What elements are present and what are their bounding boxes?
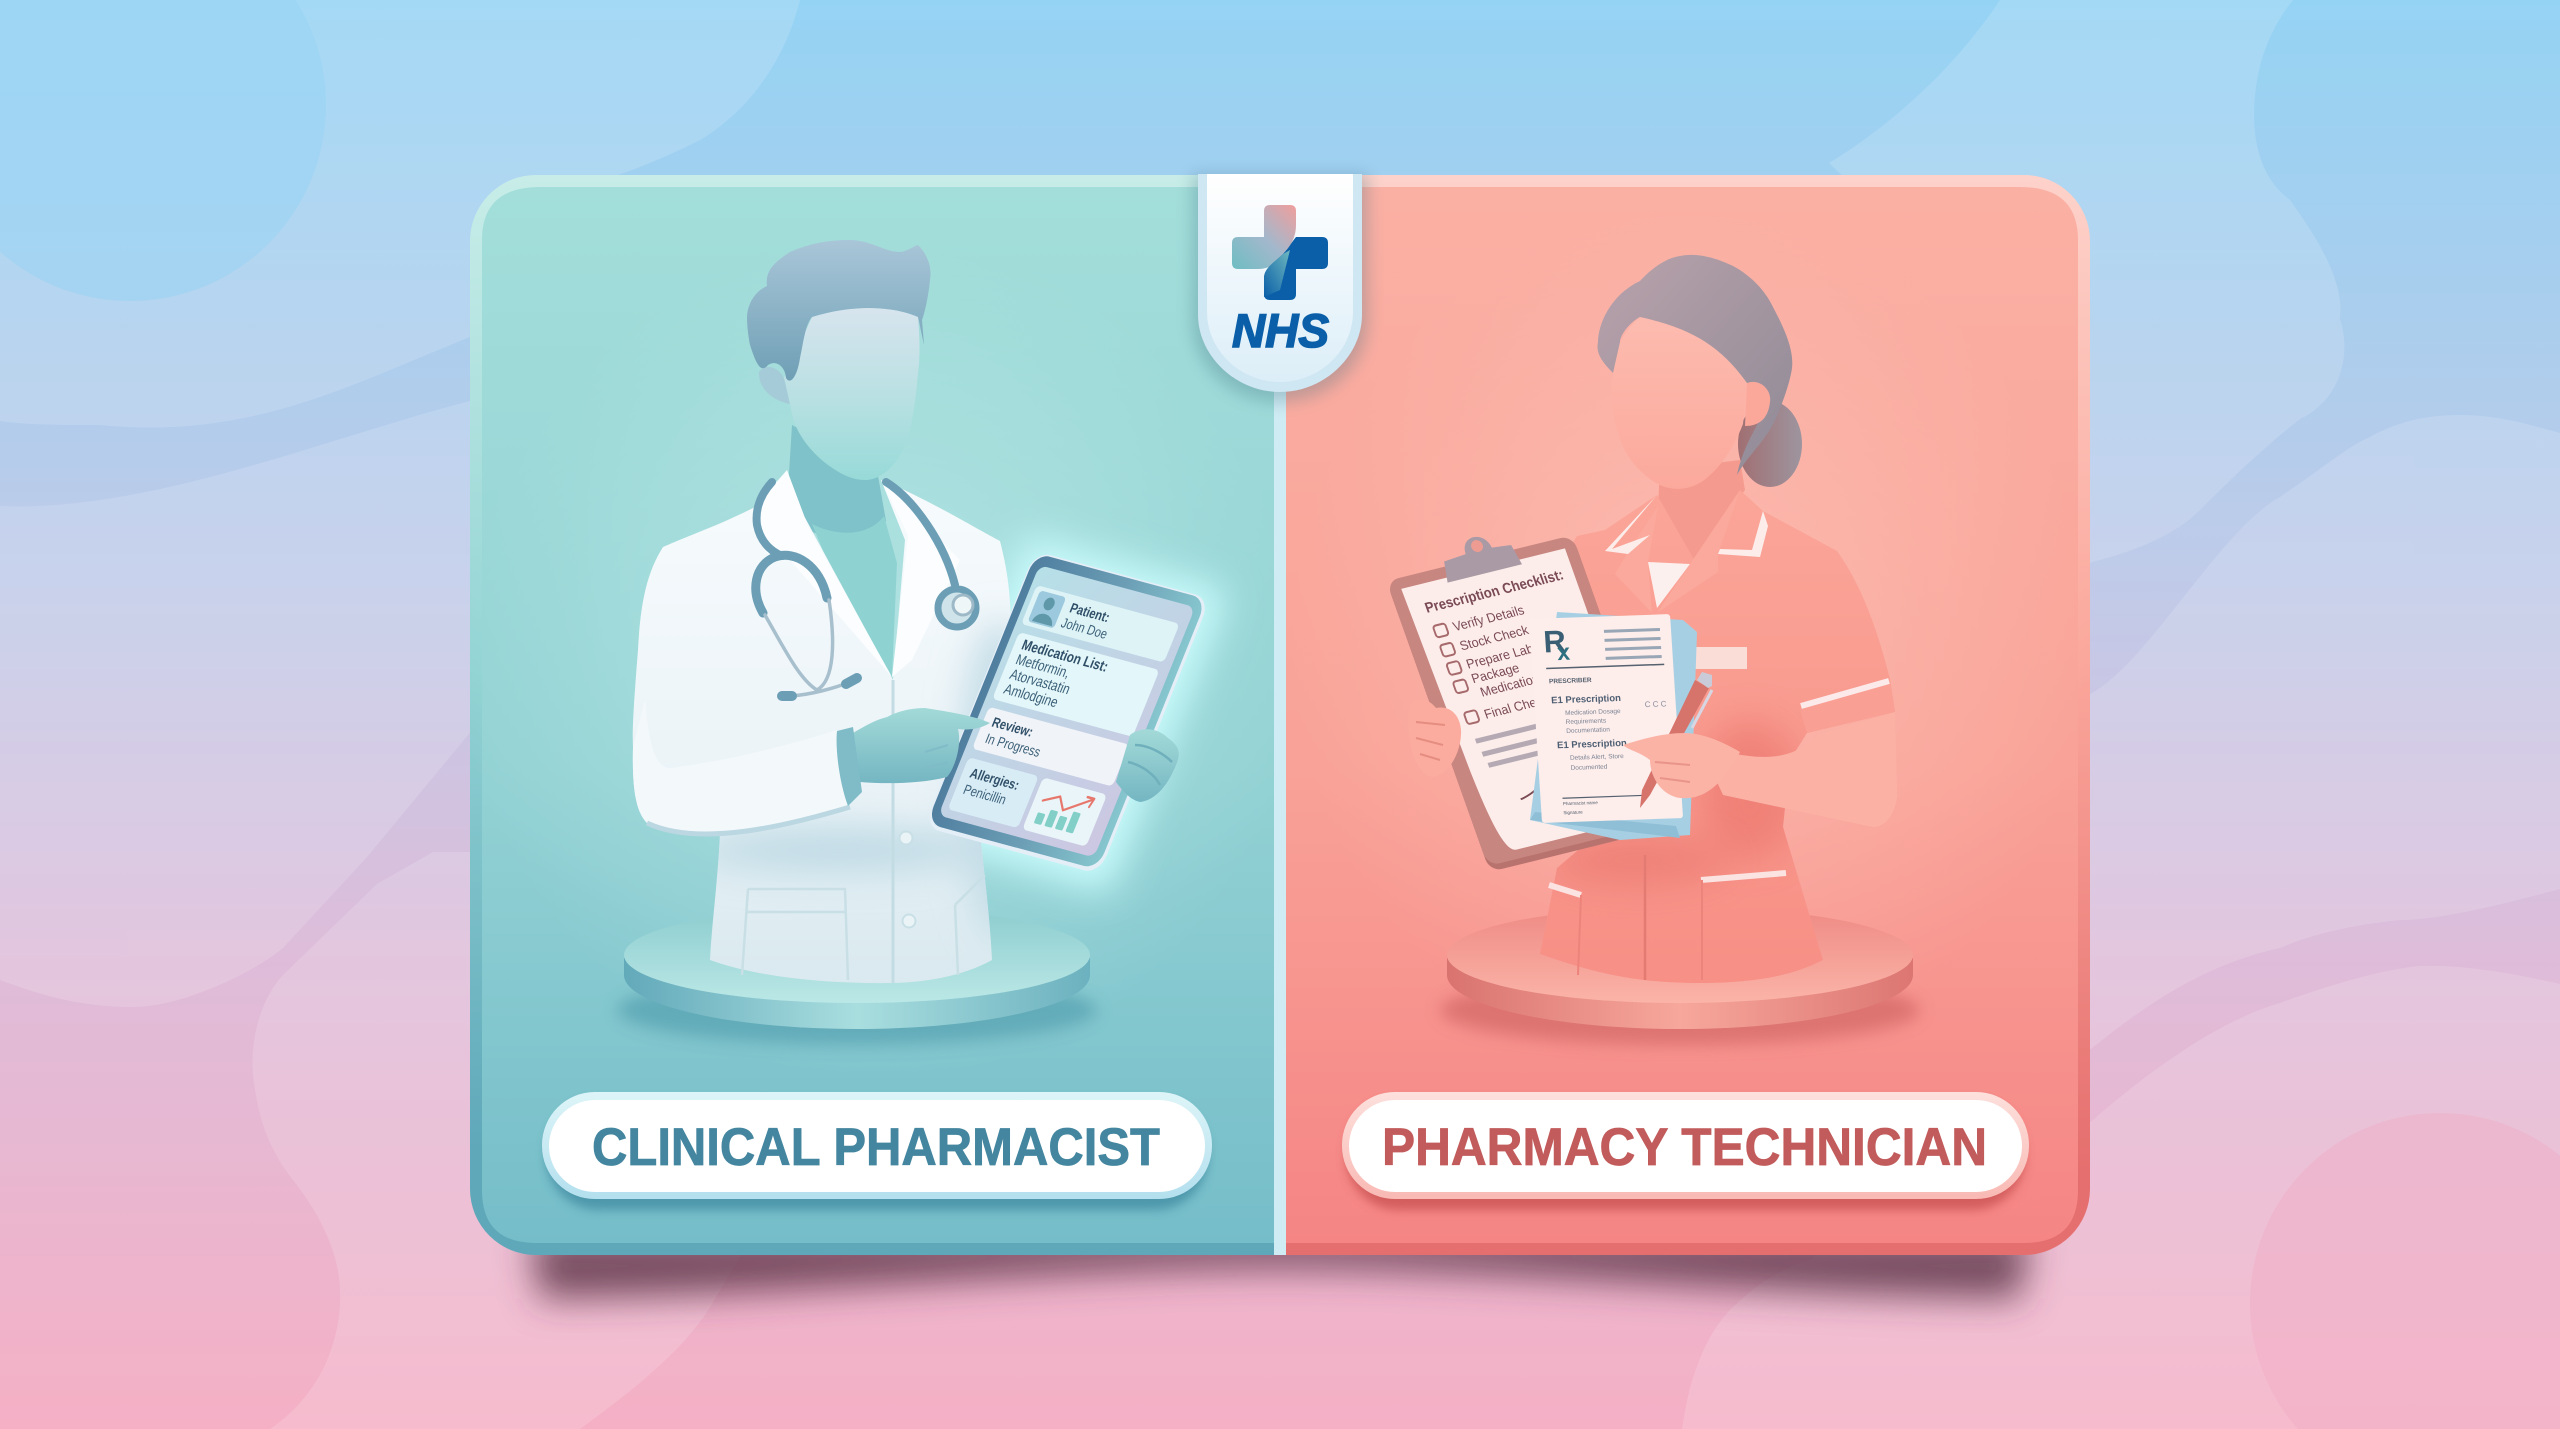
- prescription sheet: Signature: [1563, 810, 1583, 815]
- tablet card: patient: [1021, 585, 1180, 663]
- icon: NHS cross: [1232, 205, 1328, 300]
- NHS wordmark: NHS: [1232, 304, 1329, 357]
- clipboard: [1379, 515, 1676, 872]
- panel: pharmacy technician figure: [1379, 255, 1920, 1045]
- tablet card: patient: John Doe: [1059, 615, 1110, 642]
- platform: [1440, 907, 1920, 1045]
- pen: [1640, 672, 1712, 808]
- checklist text: Stock Check: [1457, 622, 1531, 653]
- head: [747, 240, 930, 480]
- prescription sheet: E1 Prescription: [1557, 738, 1627, 751]
- label: clinical pharmacist: CLINICAL PHARMACIST: [592, 1118, 1160, 1177]
- tablet: [924, 551, 1211, 874]
- tablet card: review: In Progress: [983, 731, 1043, 760]
- head: [1598, 255, 1792, 489]
- checklist text: Package: [1469, 660, 1521, 686]
- panel: clinical pharmacist background: [460, 175, 1300, 1255]
- tablet card: medication list: Amlodgine: [1002, 681, 1061, 711]
- tablet card: medication list: Atorvastatin: [1007, 666, 1073, 697]
- tablet card: medication list: Medication List:: [1019, 636, 1111, 675]
- prescription sheet: Pharmacist name: [1563, 800, 1598, 806]
- holding hand right: [1623, 733, 1740, 798]
- tablet card: review: Review:: [990, 715, 1035, 740]
- prescription sheet: Documentation: [1566, 726, 1611, 735]
- lab coat: [632, 470, 1010, 984]
- tablet card: allergies: Allergies:: [968, 766, 1022, 793]
- prescription sheet: C C C: [1644, 699, 1667, 709]
- checklist text: Medication: [1478, 671, 1542, 700]
- Rx symbol: x: [1556, 639, 1571, 665]
- prescription sheet: Documented: [1570, 764, 1608, 772]
- stethoscope: [756, 482, 976, 696]
- tablet card: medication list: Metformin,: [1013, 651, 1073, 681]
- holding hand left: [1408, 699, 1461, 777]
- clipboard clip: [1435, 528, 1522, 583]
- bun: [1738, 401, 1802, 487]
- checklist text: [1423, 567, 1620, 767]
- prescription sheet: E1 Prescription: [1551, 693, 1621, 706]
- prescription sheet: [1529, 614, 1683, 823]
- uniform: [1540, 490, 1896, 983]
- tablet card: allergies: Penicillin: [961, 782, 1009, 808]
- checklist text: Final Check: [1482, 691, 1551, 722]
- prescription sheet: PRESCRIBER: [1549, 677, 1592, 685]
- tablet card: medication list: [992, 632, 1160, 737]
- panel: clinical pharmacist figure: [617, 240, 1211, 1045]
- panel: pharmacy technician background: [1280, 175, 2090, 1255]
- label: pharmacy technician: [1342, 1092, 2029, 1210]
- NHS badge: [1192, 174, 1368, 402]
- tablet card: review: [972, 707, 1129, 787]
- Rx symbol: R: [1542, 624, 1567, 660]
- scrub top: [812, 516, 897, 677]
- label: clinical pharmacist: [542, 1092, 1212, 1210]
- pointing hand: [837, 708, 990, 806]
- neck: [788, 425, 886, 539]
- checklist text: Verify Details: [1451, 602, 1526, 634]
- tablet card: chart: [1022, 777, 1107, 847]
- tablet card: allergies: [948, 757, 1039, 828]
- panel: comparison card: [460, 175, 2090, 1255]
- glow behind tablet: [926, 553, 1210, 877]
- tablet card: patient: Patient:: [1067, 600, 1112, 625]
- platform: [617, 907, 1097, 1045]
- prescription sheet: Requirements: [1565, 718, 1607, 726]
- holding hand: [1116, 729, 1179, 802]
- card shadow: [530, 1235, 2030, 1298]
- prescription stack: [1529, 612, 1697, 840]
- prescription sheet: Medication Dosage: [1565, 708, 1621, 717]
- checklist text: Prepare Labels: [1464, 637, 1551, 672]
- label: pharmacy technician: PHARMACY TECHNICIAN: [1382, 1118, 1987, 1177]
- signature: [1516, 769, 1598, 822]
- prescription sheet: Details Alert, Store: [1570, 753, 1624, 762]
- center divider: [1274, 380, 1286, 1255]
- neck: [1648, 460, 1745, 610]
- checklist text: Prescription Checklist:: [1423, 567, 1566, 617]
